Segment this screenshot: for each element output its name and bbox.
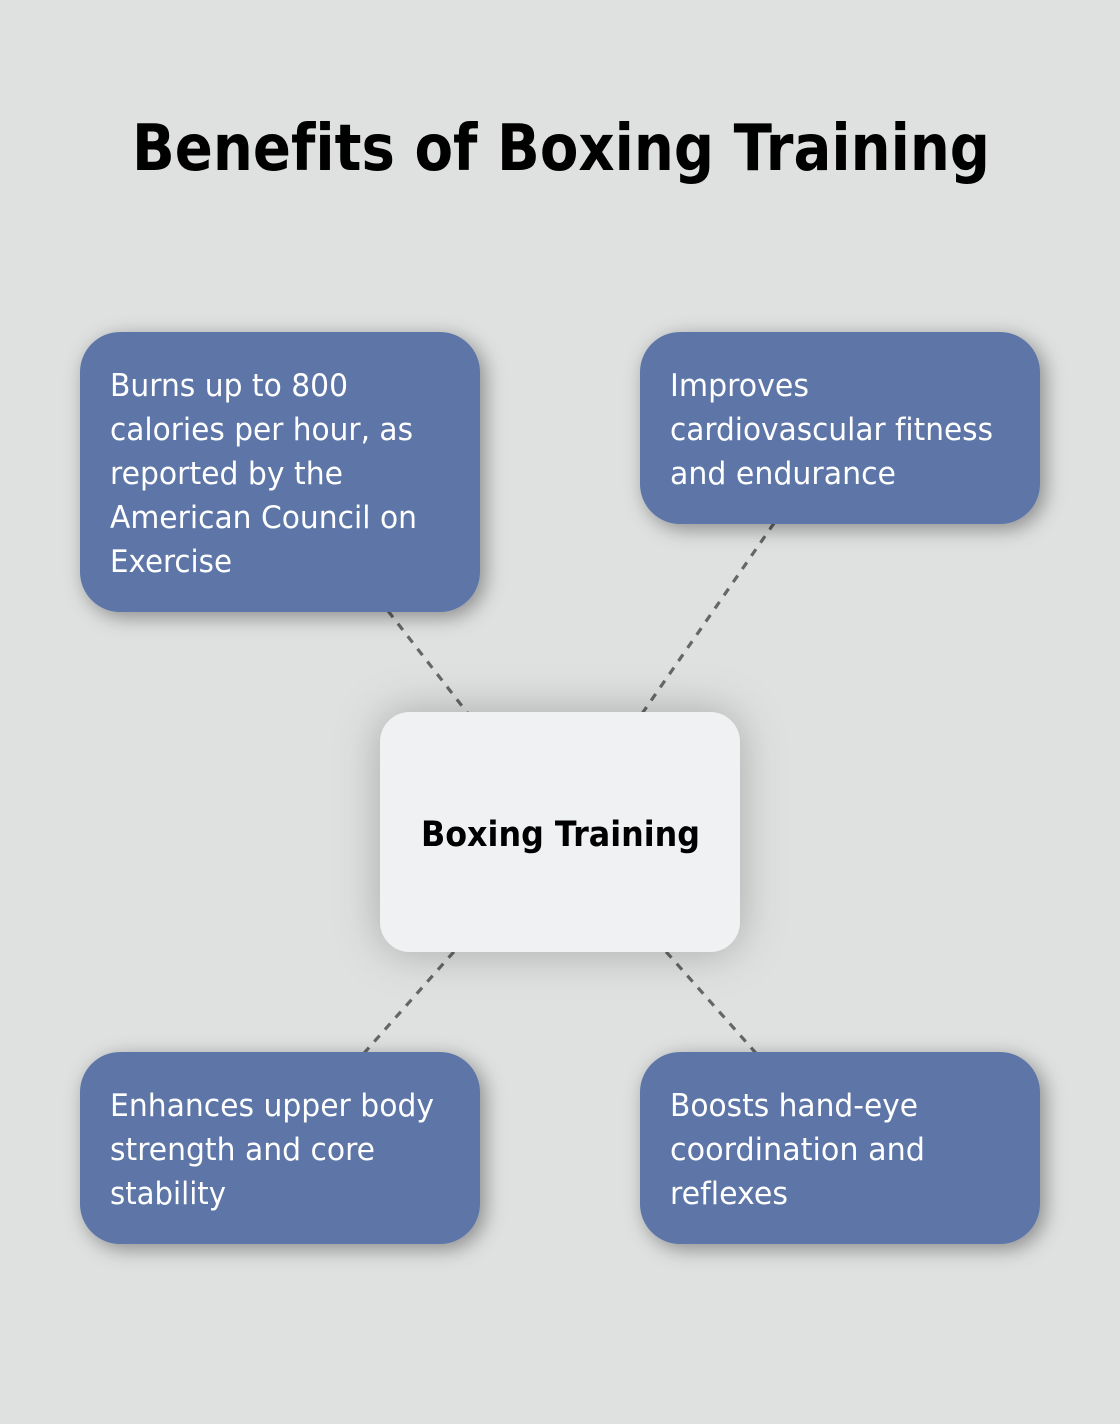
panel: coordination: coordination and xyxy=(670,1132,925,1168)
panel: coordination: Boosts hand-eye xyxy=(670,1088,918,1124)
panel: calories: calories per hour, as xyxy=(110,412,413,448)
panel: calories: Exercise xyxy=(110,544,232,580)
panel: center node xyxy=(380,712,740,952)
panel: calories xyxy=(80,332,480,612)
panel: strength: stability xyxy=(110,1176,226,1212)
panel: coordination xyxy=(640,1052,1040,1244)
panel: calories: American Council on xyxy=(110,500,417,536)
connector: bottom right xyxy=(560,832,840,1148)
panel: cardiovascular: and endurance xyxy=(670,456,896,492)
connector: bottom left xyxy=(280,832,560,1148)
panel: strength: Enhances upper body xyxy=(110,1088,434,1124)
title: Benefits of Boxing Training xyxy=(132,111,990,186)
panel: cardiovascular: cardiovascular fitness xyxy=(670,412,993,448)
panel: calories: Burns up to 800 xyxy=(110,368,348,404)
panel: cardiovascular: Improves xyxy=(670,368,809,404)
panel: calories: reported by the xyxy=(110,456,343,492)
connector: top right xyxy=(560,428,840,832)
panel: strength xyxy=(80,1052,480,1244)
panel: cardiovascular xyxy=(640,332,1040,524)
connector: top left xyxy=(280,472,560,832)
panel: strength: strength and core xyxy=(110,1132,375,1168)
panel: center node: Boxing Training xyxy=(421,815,700,855)
panel: coordination: reflexes xyxy=(670,1176,788,1212)
